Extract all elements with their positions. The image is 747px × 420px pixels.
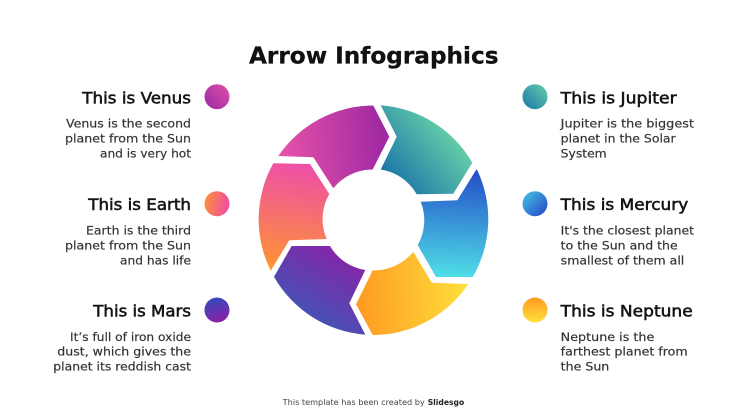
text: Jupiter description: planet in the Solar [561,132,676,146]
heading: Mercury: This is Mercury [560,195,688,214]
text: Jupiter description [560,117,695,161]
text: Jupiter description: System [561,147,607,161]
text: Mars description [53,330,192,374]
heading: Mars: This is Mars [92,302,191,321]
arrow segment: Neptune [356,252,468,335]
arrow segment: Venus [278,106,389,188]
title: Arrow Infographics [249,44,498,70]
text: Mercury description: It's the closest planet [561,223,695,237]
text: Venus description: Venus is the second [66,117,191,131]
arrow segment: Earth [259,163,329,271]
text: Neptune description [561,330,688,374]
footer credit: This template has been created by [282,398,425,407]
panel: Mars [53,298,229,374]
icon: Jupiter dot [522,84,548,109]
text: Jupiter description: Jupiter is the biggest [560,117,695,131]
text: Mercury description [561,223,695,267]
heading: Earth: This is Earth [87,195,191,214]
icon: Neptune dot [522,298,548,322]
icon: Mars dot [204,298,230,322]
text: Mercury description: smallest of them all [561,253,684,267]
icon: Venus dot [204,84,230,109]
heading: Neptune: This is Neptune [560,302,693,321]
text: Mars description: It’s full of iron oxide [70,330,191,344]
panel: Mercury [522,191,695,267]
text: Earth description [65,223,191,267]
panel: Venus [65,84,230,161]
text: Earth description: Earth is the third [86,223,191,237]
chart: circular arrow cycle [259,105,488,335]
heading: Venus: This is Venus [81,88,191,107]
footer credit: Slidesgo [428,398,465,407]
text: Neptune description: the Sun [561,360,609,374]
arrow segment: Mars [274,246,365,335]
text: Earth description: planet from the Sun [65,238,191,252]
text: Mars description: planet its reddish cast [53,360,192,374]
panel: Jupiter [522,84,695,161]
icon: Earth dot [204,191,230,216]
text: Venus description: planet from the Sun [65,132,191,146]
icon: Mercury dot [522,191,548,216]
text: Venus description [65,117,192,161]
text: Mars description: dust, which gives the [57,345,191,359]
text: Neptune description: Neptune is the [561,330,654,344]
heading: Jupiter: This is Jupiter [560,88,677,107]
text: Mercury description: to the Sun and the [561,238,678,252]
arrow segment: Mercury [418,169,488,277]
panel: Earth [65,191,230,267]
text: Venus description: and is very hot [100,147,192,161]
arrow segment: Jupiter [381,105,472,194]
panel: Neptune [522,298,693,374]
text: Neptune description: farthest planet from [561,345,688,359]
text: Earth description: and has life [120,253,191,267]
